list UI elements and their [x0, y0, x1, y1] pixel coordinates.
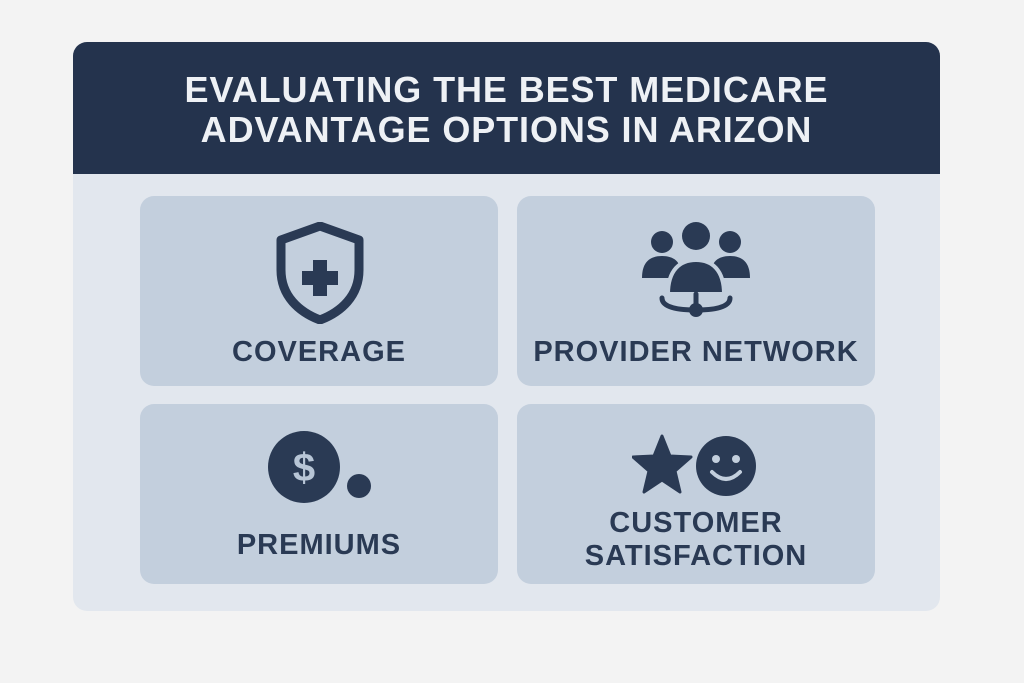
label: premiums: PREMIUMS: [237, 529, 401, 561]
icon: shield: [276, 222, 364, 324]
panel: main container: [73, 42, 940, 611]
label: customer satisfaction: SATISFACTION: [585, 540, 807, 572]
panel: provider network: [517, 196, 875, 386]
title: [73, 42, 940, 174]
title: ADVANTAGE OPTIONS IN ARIZON: [201, 109, 812, 150]
title: EVALUATING THE BEST MEDICARE: [185, 69, 828, 110]
label: coverage: COVERAGE: [232, 336, 406, 368]
panel: coverage: [140, 196, 498, 386]
panel: premiums: [140, 404, 498, 584]
icon: dollar coin: [268, 431, 371, 503]
icon: dollar coin: $: [293, 446, 315, 490]
label: customer satisfaction: [585, 507, 807, 572]
label: customer satisfaction: CUSTOMER: [609, 507, 783, 539]
icon: people network: [642, 222, 750, 317]
icon: star and smiley: [632, 434, 756, 496]
panel: customer satisfaction: [517, 404, 875, 584]
label: provider network: PROVIDER NETWORK: [533, 336, 859, 368]
